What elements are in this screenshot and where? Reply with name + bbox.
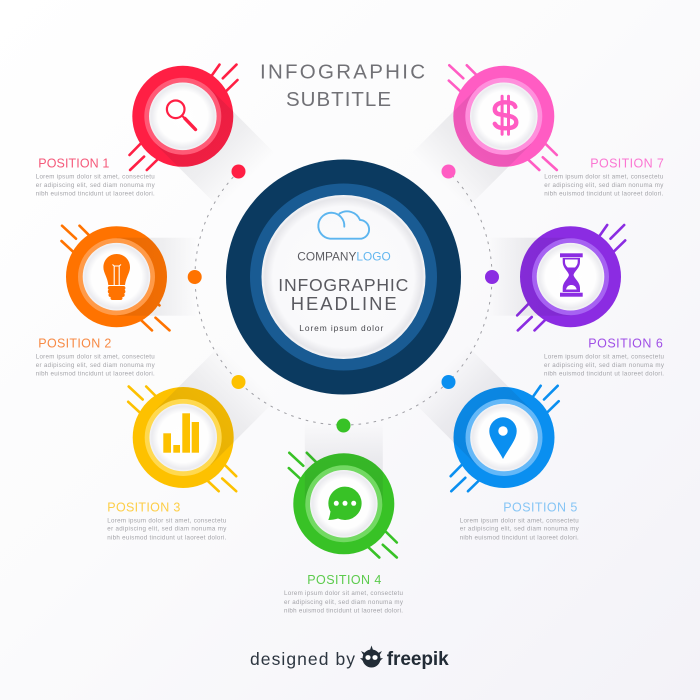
marker dots <box>188 164 499 432</box>
text block <box>544 354 665 378</box>
text block: Lorem ipsum dolor sit amet, consectetu <box>460 517 579 524</box>
text block <box>36 354 156 378</box>
heading: POSITION 6 <box>588 337 663 351</box>
text block <box>36 173 156 197</box>
heading: POSITION 2 <box>38 337 111 351</box>
accent lines <box>128 386 236 491</box>
text block: nibh euismod tincidunt ut laoreet dolori. <box>36 190 155 197</box>
headline: HEADLINE <box>291 293 397 314</box>
icon: hourglass <box>560 253 583 297</box>
text block: nibh euismod tincidunt ut laoreet dolori. <box>284 607 403 614</box>
ring <box>454 387 554 488</box>
subtitle heading: SUBTITLE <box>286 88 391 111</box>
inner disc <box>310 470 378 538</box>
heading: POSITION 4 <box>307 573 381 587</box>
inner disc <box>470 404 538 471</box>
text block: Lorem ipsum dolor sit amet, consectetu <box>544 173 664 180</box>
inner disc <box>470 82 538 150</box>
heading: POSITION 5 <box>503 501 577 515</box>
text block: er adipiscing elit, sed diam nonuma my <box>36 182 156 189</box>
inner disc <box>149 82 217 150</box>
icon: map pin <box>489 417 517 459</box>
panel: position 4 <box>284 422 404 614</box>
text block: nibh euismod tincidunt ut laoreet dolori. <box>544 190 664 197</box>
text block <box>544 173 664 197</box>
inner disc <box>537 243 604 310</box>
accent lines <box>289 453 397 558</box>
panel: position 6 <box>488 225 665 378</box>
panel: position 5 <box>411 345 580 541</box>
inner disc <box>83 243 150 310</box>
text block <box>284 590 404 614</box>
dashed connector arc <box>195 172 492 425</box>
headline <box>278 275 409 314</box>
long shadow <box>155 89 275 209</box>
inner ring <box>305 465 382 542</box>
central circle <box>226 160 461 394</box>
text block: er adipiscing elit, sed diam nonuma my <box>284 599 404 606</box>
icon: magnifier <box>167 100 196 130</box>
text block: nibh euismod tincidunt ut laoreet dolori. <box>36 371 155 378</box>
text block <box>460 517 580 541</box>
long shadow <box>116 238 198 316</box>
ring <box>66 226 167 327</box>
text block: er adipiscing elit, sed diam nonuma my <box>36 362 156 369</box>
text block: er adipiscing elit, sed diam nonuma my <box>107 526 227 533</box>
panel: position 3 <box>107 345 276 541</box>
text block: er adipiscing elit, sed diam nonuma my <box>544 182 664 189</box>
company logo wordmark: COMPANYLOGO <box>297 249 391 263</box>
text block <box>107 517 227 541</box>
ring <box>133 387 234 488</box>
long shadow <box>411 89 531 209</box>
long shadow <box>305 422 383 504</box>
inner ring <box>78 238 155 315</box>
icon: chat bubble <box>328 487 362 520</box>
text block: nibh euismod tincidunt ut laoreet dolori. <box>107 534 227 541</box>
subtitle heading: INFOGRAPHIC <box>260 60 425 84</box>
accent lines <box>517 225 625 330</box>
inner ring <box>466 399 542 476</box>
heading: POSITION 3 <box>107 501 180 515</box>
long shadow <box>411 345 532 465</box>
inner ring <box>465 78 542 155</box>
panel: position 1 <box>36 65 275 209</box>
text block: Lorem ipsum dolor sit amet, consectetu <box>36 354 155 361</box>
long shadow <box>488 238 570 316</box>
panel: position 2 <box>36 226 199 378</box>
icon: light bulb <box>103 254 130 300</box>
headline: INFOGRAPHIC <box>278 275 409 295</box>
inner ring <box>532 238 609 315</box>
long shadow <box>156 345 276 465</box>
text block: er adipiscing elit, sed diam nonuma my <box>544 362 665 369</box>
ring <box>520 226 621 327</box>
accent lines <box>130 65 238 170</box>
inner ring <box>145 399 222 476</box>
heading: POSITION 7 <box>590 156 664 170</box>
accent lines <box>451 386 559 491</box>
text block: Lorem ipsum dolor sit amet, consectetu <box>107 517 227 524</box>
footer credit <box>250 646 449 670</box>
text block: nibh euismod tincidunt ut laoreet dolori. <box>460 534 579 541</box>
middle ring <box>250 184 437 370</box>
tagline: Lorem ipsum dolor <box>299 323 384 333</box>
inner ring <box>144 78 221 155</box>
panel: position 7 <box>411 65 664 209</box>
ring <box>293 453 394 554</box>
icon: freepik mascot <box>360 646 383 668</box>
icon: dollar sign <box>495 96 516 134</box>
inner disc <box>149 404 217 471</box>
ring <box>453 66 554 167</box>
text block: er adipiscing elit, sed diam nonuma my <box>460 526 580 533</box>
text block: nibh euismod tincidunt ut laoreet dolori. <box>544 371 664 378</box>
accent lines <box>449 65 557 170</box>
text block: Lorem ipsum dolor sit amet, consectetu <box>36 173 155 180</box>
accent lines <box>62 226 170 330</box>
footer credit: designed by <box>250 649 355 669</box>
subtitle heading <box>260 60 425 111</box>
text block: Lorem ipsum dolor sit amet, consectetu <box>284 590 404 597</box>
inner disc <box>262 195 426 359</box>
outer ring <box>226 160 461 394</box>
footer credit: freepik <box>387 649 449 670</box>
icon: cloud logo <box>318 211 369 239</box>
ring <box>132 66 233 167</box>
heading: POSITION 1 <box>38 156 109 170</box>
icon: bar chart <box>163 413 199 453</box>
text block: Lorem ipsum dolor sit amet, consectetu <box>544 354 665 361</box>
